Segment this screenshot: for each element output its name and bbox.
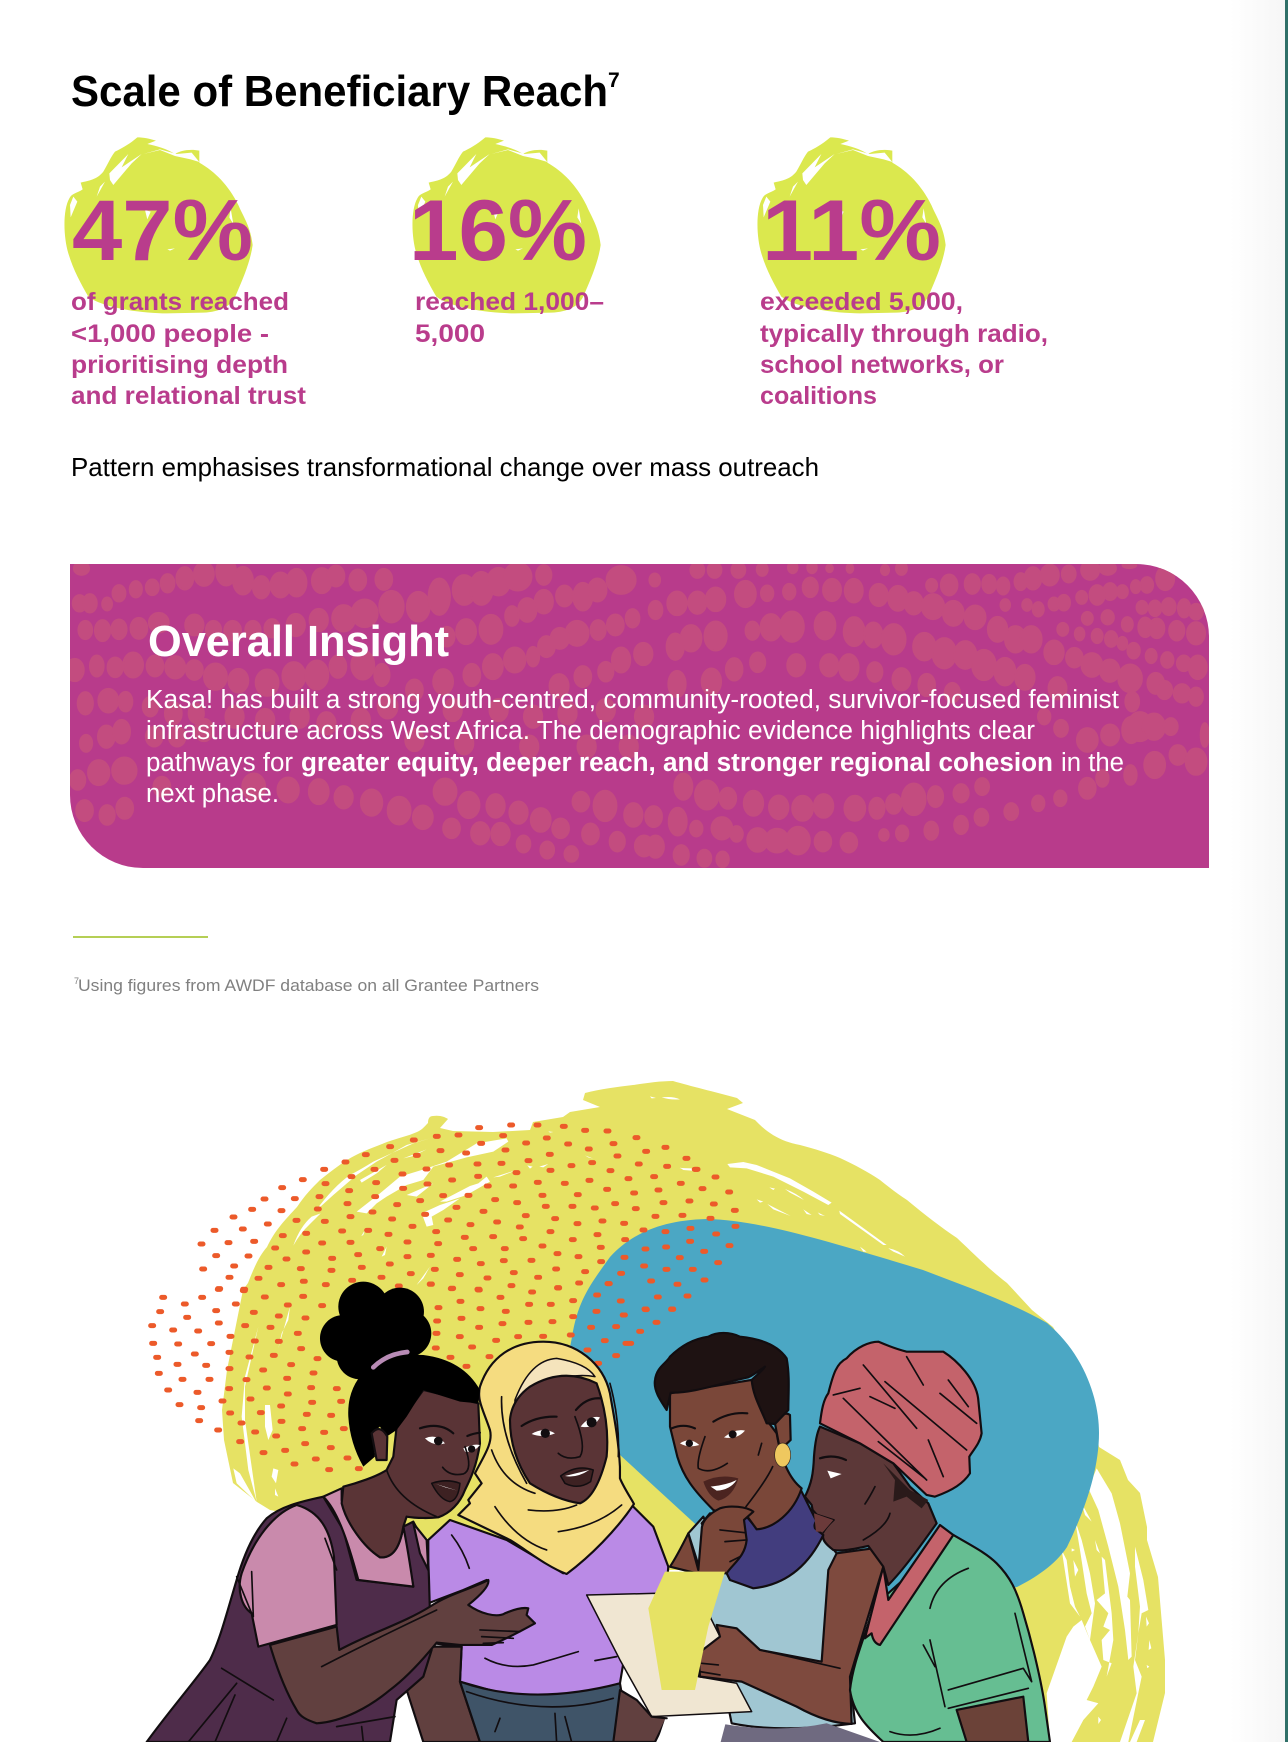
stat: 11 percent: typically through radio, bbox=[760, 320, 1048, 348]
footnote: 7 bbox=[74, 976, 79, 986]
panel body text: greater equity, deeper reach, and stronger regional cohesion bbox=[301, 749, 1053, 777]
panel body text: in the bbox=[1061, 749, 1124, 777]
figure: woman with hair bun bbox=[147, 1282, 535, 1742]
blue blob bbox=[560, 1219, 1099, 1620]
white marks: upper right of brush bbox=[679, 1162, 905, 1257]
stat: 47 percent bbox=[64, 137, 307, 410]
stat: 16 percent: reached 1,000– bbox=[415, 288, 604, 316]
stat: 11 percent bbox=[757, 137, 1048, 410]
stat: 47 percent: of grants reached bbox=[71, 288, 289, 316]
white gap between figures bbox=[657, 1719, 727, 1742]
orange halftone dots bbox=[151, 1125, 737, 1470]
stat: 16 percent: 16% bbox=[409, 183, 587, 279]
stat: 47 percent: <1,000 people - bbox=[71, 320, 269, 348]
icon: lime brush blob bbox=[64, 137, 253, 313]
hair tie bbox=[373, 1352, 407, 1367]
hair: bun bbox=[320, 1282, 431, 1379]
stat: 47 percent: prioritising depth bbox=[71, 351, 288, 379]
stat: 11 percent: exceeded 5,000, bbox=[760, 288, 963, 316]
pattern statement: Pattern emphasises transformational change over mass outreach bbox=[71, 452, 819, 482]
icon: lime brush blob bbox=[757, 137, 946, 313]
stat: 47 percent: 47% bbox=[72, 183, 253, 279]
figure: woman in red turban bbox=[698, 1342, 1050, 1742]
white marks: upper left of brush bbox=[293, 1096, 697, 1285]
footnote rule bbox=[73, 936, 208, 938]
figure: woman in yellow hijab bbox=[407, 1342, 668, 1742]
panel body text: next phase. bbox=[146, 780, 279, 808]
right teal edge bar bbox=[1285, 0, 1288, 1742]
panel: overall insight bbox=[65, 558, 1209, 868]
panel body text: infrastructure across West Africa. The demographic evidence highlights clear bbox=[146, 717, 1036, 745]
stat: 11 percent: school networks, or bbox=[760, 351, 1004, 379]
stat: 47 percent: and relational trust bbox=[71, 382, 307, 410]
figure: woman with short hair bbox=[655, 1333, 880, 1742]
footnote: Using figures from AWDF database on all Grantee Partners bbox=[78, 976, 539, 995]
stat: 11 percent: 11% bbox=[762, 183, 941, 279]
illustration: four women reading together bbox=[147, 1081, 1165, 1742]
panel body text: Kasa! has built a strong youth-centred, community-rooted, survivor-focused feminist bbox=[146, 686, 1119, 714]
white marks: left of brush bbox=[233, 1273, 427, 1502]
panel heading: Overall Insight bbox=[148, 617, 449, 666]
skin: lower arm of woman in hijab bbox=[613, 1690, 667, 1742]
earring bbox=[775, 1443, 791, 1467]
stat: 16 percent bbox=[409, 137, 604, 348]
title: 7 bbox=[608, 69, 620, 92]
yellow brush stroke bbox=[222, 1081, 1165, 1742]
panel body text: pathways for bbox=[146, 749, 294, 777]
yellow polygon over paper bbox=[648, 1572, 725, 1690]
white marks: right of brush bbox=[1047, 1468, 1151, 1742]
panel body text bbox=[146, 686, 1124, 808]
icon: lime brush blob bbox=[412, 137, 601, 313]
page edge shading bbox=[1230, 0, 1285, 1742]
title: Scale of Beneficiary Reach bbox=[71, 67, 608, 116]
stat: 16 percent: 5,000 bbox=[415, 320, 485, 348]
figures bbox=[655, 1333, 880, 1742]
stat: 11 percent: coalitions bbox=[760, 382, 877, 410]
paper bbox=[587, 1593, 752, 1717]
